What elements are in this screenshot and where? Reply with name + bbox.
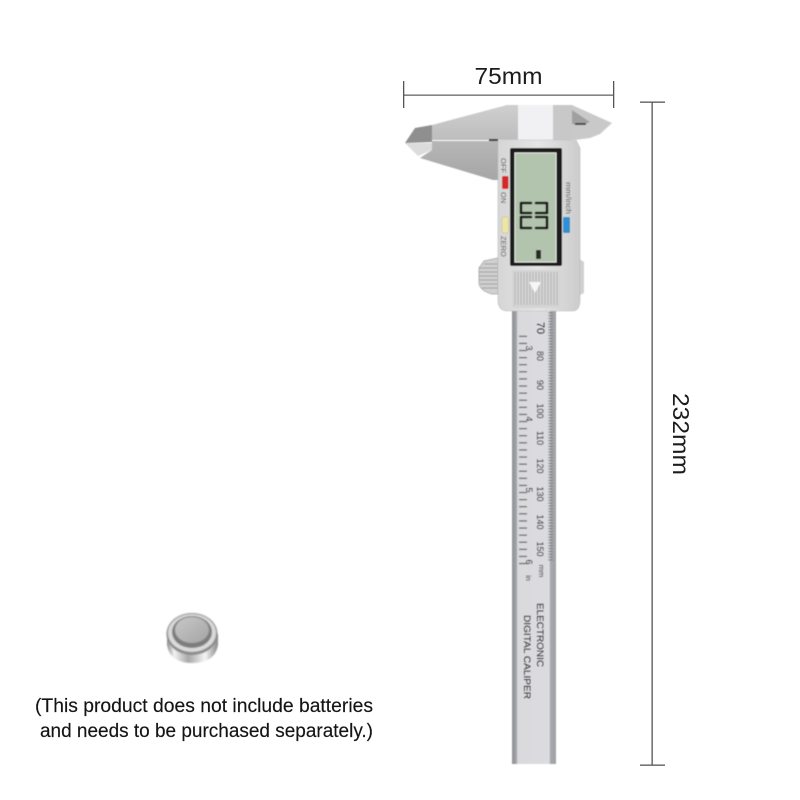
ruler scale numbers: 5 <box>524 487 534 493</box>
battery note <box>35 696 373 742</box>
ruler scale numbers: 130 <box>535 486 545 502</box>
button labels: ZERO <box>499 236 508 257</box>
battery note: (This product does not include batteries <box>35 696 373 717</box>
display housing <box>498 140 580 311</box>
ruler scale numbers: 100 <box>535 403 545 419</box>
label: 75mm: 75mm <box>474 63 542 89</box>
button labels: OFF <box>499 158 508 173</box>
LCD reading <box>521 203 547 228</box>
ruler scale numbers: mm <box>537 565 546 577</box>
ruler scale numbers: 3 <box>524 345 534 351</box>
ruler label: ELECTRONIC DIGITAL CALIPER: ELECTRONIC <box>534 603 545 667</box>
ruler scale numbers: 140 <box>535 514 545 530</box>
ruler scale numbers: 70 <box>534 322 546 334</box>
ruler scale numbers: 120 <box>535 458 545 474</box>
ruler scale numbers: 4 <box>524 416 534 422</box>
LCD screen <box>510 148 562 266</box>
jaws <box>405 105 612 180</box>
ruler scale numbers: 150 <box>535 541 545 557</box>
ruler scale numbers: 6 <box>524 559 534 565</box>
knobs <box>479 258 584 296</box>
ruler scale numbers: 90 <box>535 380 545 390</box>
button labels <box>499 158 573 257</box>
ruler scale numbers: 80 <box>535 351 545 361</box>
caliper <box>405 105 612 764</box>
ruler beam <box>512 310 556 764</box>
battery note: and needs to be purchased separately.) <box>40 721 373 742</box>
button labels: mm/inch <box>564 182 573 214</box>
ruler scale numbers <box>524 322 546 581</box>
ruler label: ELECTRONIC DIGITAL CALIPER: DIGITAL CALIPER <box>521 615 532 699</box>
button labels: ON <box>499 192 508 203</box>
buttons <box>502 176 570 233</box>
ruler scale numbers: 110 <box>535 431 545 445</box>
button-cell battery <box>166 613 218 663</box>
slide pad with arrow <box>512 270 560 308</box>
ruler scale numbers: in <box>524 575 531 581</box>
label: 232mm: 232mm <box>668 393 694 475</box>
ruler label: ELECTRONIC DIGITAL CALIPER <box>521 603 545 699</box>
